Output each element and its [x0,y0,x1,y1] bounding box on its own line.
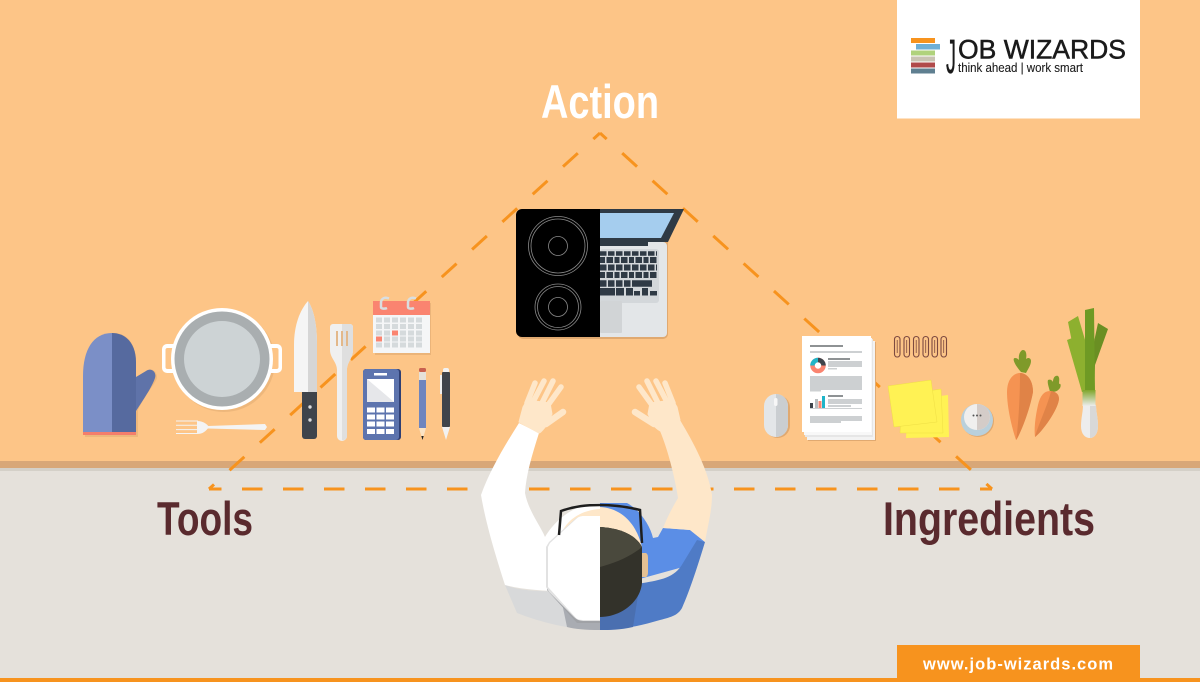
cooktop [516,209,600,337]
right hand [635,381,680,431]
icon: large carrot [1007,350,1033,440]
logo wordmark: OB WIZARDS [958,34,1126,64]
dashed triangle connecting action, tools and ingredients [209,133,992,489]
logo panel [897,0,1140,118]
website banner [897,645,1140,682]
website banner: www.job-wizards.com [922,656,1113,674]
logo wordmark: J [946,31,956,84]
icon: oven mitt [83,333,157,437]
report bar chart [810,396,825,408]
icon: sticky notes [888,380,949,438]
heading: Tools: Tools [157,492,253,545]
logo wordmark: think ahead | work smart [958,60,1083,75]
logo wordmark [946,31,1126,84]
icon: pencil [419,368,426,440]
icon: computer mouse [764,394,790,438]
icon: small carrot [1035,376,1061,437]
torso shirt [505,503,705,630]
icon: paper clips [894,336,946,357]
icon: calendar [373,298,431,355]
icon: spice shaker [961,404,994,437]
laptop [595,209,684,337]
icon: cooktop and laptop [516,209,684,339]
heading: Ingredients: Ingredients [883,492,1095,545]
icon: stacked books [911,38,940,74]
tools group [83,298,450,441]
icon: mobile phone [363,369,401,440]
icon: stack of report papers [802,336,876,441]
icon: fork [176,421,267,434]
left arm in white sleeve [481,423,600,591]
heading: Action: Action [541,75,659,128]
head [546,507,648,623]
icon: pen [440,368,450,440]
icon: pot [162,308,282,412]
report donut chart [812,360,824,371]
icon: spatula [330,324,353,441]
right arm skin [660,420,712,542]
person seen from above [481,381,712,630]
left hand [519,381,563,433]
ingredients group [764,308,1108,441]
headband glasses [559,505,642,543]
icon: leek [1067,308,1108,438]
icon: knife [294,301,317,439]
